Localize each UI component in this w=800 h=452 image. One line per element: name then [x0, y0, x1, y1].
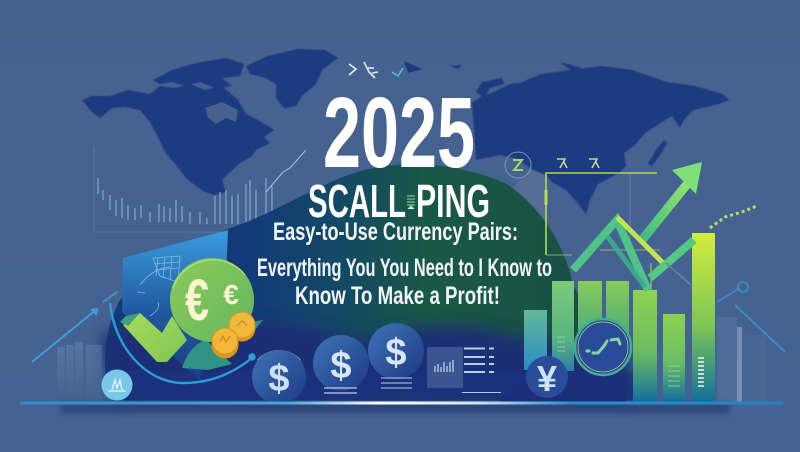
map: Eurasia — [472, 66, 729, 214]
faint grey landmass beneath map near frame — [513, 170, 546, 232]
yen coin — [526, 356, 568, 399]
small light blue badge — [102, 370, 132, 400]
year heading: 2025 — [323, 77, 475, 189]
left candlestick chart — [94, 146, 306, 232]
round green icon badge — [575, 319, 631, 375]
dollar coin 1 — [252, 350, 306, 404]
heading: PING: PING — [416, 175, 490, 227]
world map — [82, 49, 729, 214]
left rising arrow — [32, 292, 117, 362]
list lines — [462, 348, 501, 392]
dome backdrop — [105, 164, 640, 400]
Hudson Bay cutout — [205, 102, 238, 124]
dollar coin 2: $ — [330, 345, 352, 387]
right blue lines — [666, 263, 785, 352]
teal shape under coins — [182, 340, 232, 370]
title — [257, 77, 552, 310]
monitor — [427, 347, 463, 388]
top plane icons — [349, 62, 420, 78]
swoosh arc — [110, 303, 254, 383]
base shadow — [60, 404, 730, 413]
heading: SCALL: SCALL — [308, 175, 406, 227]
dollar coin 3: $ — [385, 332, 407, 374]
base solid on dome — [112, 372, 640, 400]
yen coin: ¥ — [537, 358, 557, 399]
blue panel behind euro — [122, 230, 228, 380]
map: Arctic bits — [450, 62, 582, 71]
subtitle line 1: Easy-to-Use Currency Pairs: — [273, 218, 518, 246]
base shadow on dome — [100, 321, 630, 400]
rising arrows — [573, 162, 702, 290]
dollar coin 3 — [368, 323, 424, 388]
map: Arctic islands — [153, 58, 244, 88]
faint left bars — [57, 342, 102, 401]
subtitle line 2: Everything You You Need to I Know to — [257, 254, 552, 282]
base line — [20, 402, 783, 404]
chart bars — [524, 233, 715, 402]
check mark — [120, 313, 187, 362]
dotted trend line — [710, 206, 757, 228]
euro sign large: € — [185, 268, 209, 333]
map: Greenland — [246, 49, 338, 108]
dollar coin 1: $ — [268, 358, 290, 400]
euro sign small: € — [223, 279, 239, 310]
dark base strip center — [500, 372, 626, 402]
chart frame — [546, 173, 660, 290]
dollar coin 2 — [313, 335, 369, 393]
gold coins — [212, 312, 255, 358]
map: Japan islands — [648, 140, 667, 166]
euro coin — [170, 258, 254, 342]
small map icons — [505, 152, 599, 178]
faint right bars — [717, 317, 766, 402]
separator icon — [407, 196, 415, 209]
map: Scandinavia — [476, 78, 504, 98]
panel map sketch — [137, 256, 180, 316]
teal check tail — [248, 320, 263, 338]
subtitle line 3: Know To Make a Profit! — [295, 282, 500, 310]
map: North America — [82, 84, 274, 195]
